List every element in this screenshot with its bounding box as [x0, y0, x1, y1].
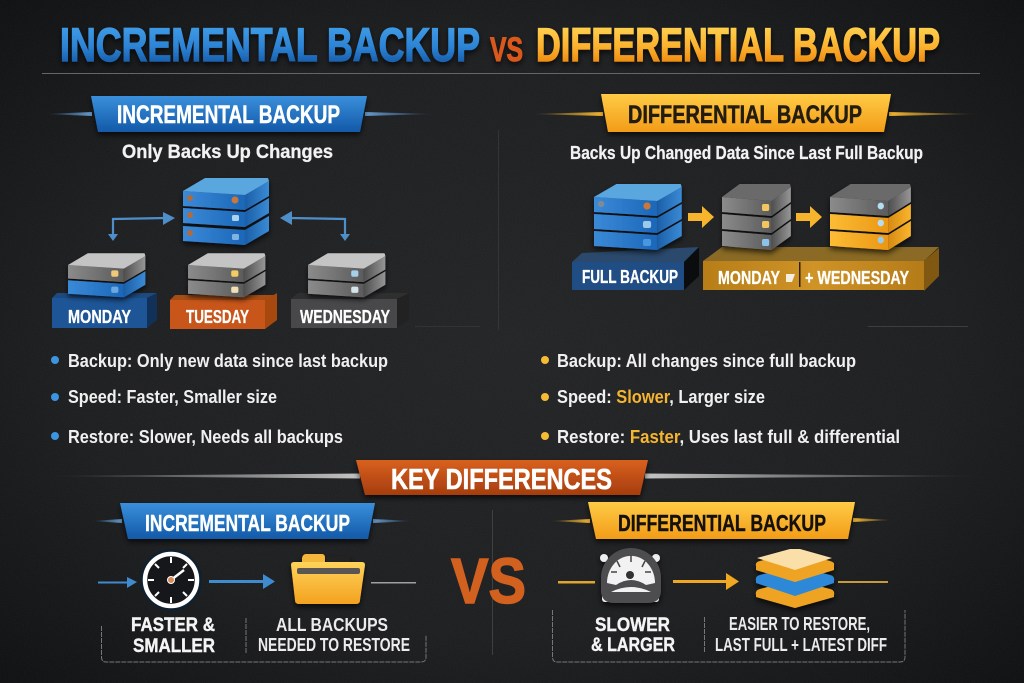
- panel: incremental backup: [45, 96, 435, 447]
- icon: central blue server: [183, 178, 269, 245]
- base: monday: MONDAY: [68, 306, 132, 327]
- text: faster and smaller: [131, 615, 215, 657]
- icon: clock: [140, 549, 202, 611]
- heading: key differences: KEY DIFFERENCES: [391, 464, 612, 496]
- box outline: [102, 618, 426, 662]
- vs mark: VS: [451, 545, 526, 617]
- panel: differential backup: [530, 94, 978, 447]
- bullet list: incremental: [51, 350, 388, 447]
- base: tuesday: TUESDAY: [186, 306, 249, 327]
- text: all backups: [258, 615, 410, 655]
- icon: folder: [291, 554, 365, 604]
- icon: layered stack: [756, 549, 834, 608]
- heading: differential ribbon small: [550, 502, 892, 539]
- bullet list: incremental: Speed: Faster, Smaller size: [68, 386, 277, 407]
- text: easier to restore: LAST FULL + LATEST DIFF: [715, 635, 887, 655]
- title: INCREMENTAL BACKUP: [60, 18, 480, 71]
- heading: incremental ribbon small: [92, 503, 412, 539]
- arrow: wednesday link: [280, 211, 350, 241]
- text: slower and larger: [591, 615, 675, 656]
- arrow: full to monday: [688, 206, 714, 228]
- bullet list: incremental: Restore: Slower, Needs all backups: [68, 426, 343, 447]
- server: monday: [68, 253, 145, 297]
- panel: key differences incremental: [92, 503, 426, 662]
- bullet list: differential: Speed: Slower, Larger size: [557, 386, 765, 407]
- base: full backup: FULL BACKUP: [582, 266, 678, 287]
- text: slower and larger: SLOWER: [595, 615, 670, 636]
- text: easier to restore: EASIER TO RESTORE,: [729, 614, 870, 634]
- heading: incremental ribbon small: INCREMENTAL BACKUP: [145, 510, 350, 536]
- panel: key differences differential: [550, 502, 905, 662]
- arrow: speedometer to stack: [673, 573, 739, 590]
- base: wednesday: [291, 293, 409, 328]
- arrow: into clock: [98, 577, 137, 588]
- text: all backups: ALL BACKUPS: [276, 615, 388, 635]
- subheading: Only Backs Up Changes: [122, 142, 333, 163]
- server: full backup: [594, 184, 682, 250]
- heading: differential ribbon small: DIFFERENTIAL BACKUP: [618, 510, 826, 536]
- text: faster and smaller: SMALLER: [133, 636, 215, 657]
- heading: incremental ribbon: [45, 96, 435, 132]
- base: monday: [52, 293, 157, 328]
- server: wednesday: [308, 253, 385, 297]
- text: faster and smaller: FASTER &: [131, 615, 215, 636]
- bullet list: differential: [541, 350, 900, 447]
- bullet list: incremental: Backup: Only new data since last backup: [68, 350, 388, 371]
- box outline: [552, 610, 905, 662]
- heading: incremental ribbon: INCREMENTAL BACKUP: [117, 101, 340, 129]
- bullet list: differential: Backup: All changes since full backup: [557, 350, 856, 371]
- base: monday + wednesday: [703, 247, 939, 291]
- text: slower and larger: & LARGER: [591, 635, 675, 656]
- heading: differential ribbon: [530, 94, 978, 132]
- title: [60, 18, 940, 71]
- title: VS: [490, 31, 523, 69]
- arrow: monday to wednesday: [796, 206, 822, 228]
- icon: speedometer: [600, 548, 661, 603]
- server: tuesday: [188, 253, 265, 297]
- arrow: monday link: [108, 212, 175, 241]
- heading: key differences: [40, 460, 985, 496]
- base: full backup: [572, 247, 699, 290]
- arrow: clock to folder: [209, 574, 275, 589]
- bullet list: differential: Restore: Faster, Uses last full & differential: [557, 426, 900, 447]
- base: wednesday: WEDNESDAY: [300, 306, 391, 327]
- base: monday + wednesday: + WEDNESDAY: [805, 267, 910, 288]
- base: monday + wednesday: MONDAY: [718, 267, 781, 288]
- base: tuesday: [170, 293, 277, 329]
- server: monday differential: [722, 184, 791, 250]
- server: wednesday differential: [830, 184, 911, 250]
- subheading: Backs Up Changed Data Since Last Full Backup: [570, 143, 923, 163]
- text: easier to restore: [715, 614, 887, 655]
- text: all backups: NEEDED TO RESTORE: [258, 635, 410, 655]
- heading: differential ribbon: DIFFERENTIAL BACKUP: [628, 101, 862, 129]
